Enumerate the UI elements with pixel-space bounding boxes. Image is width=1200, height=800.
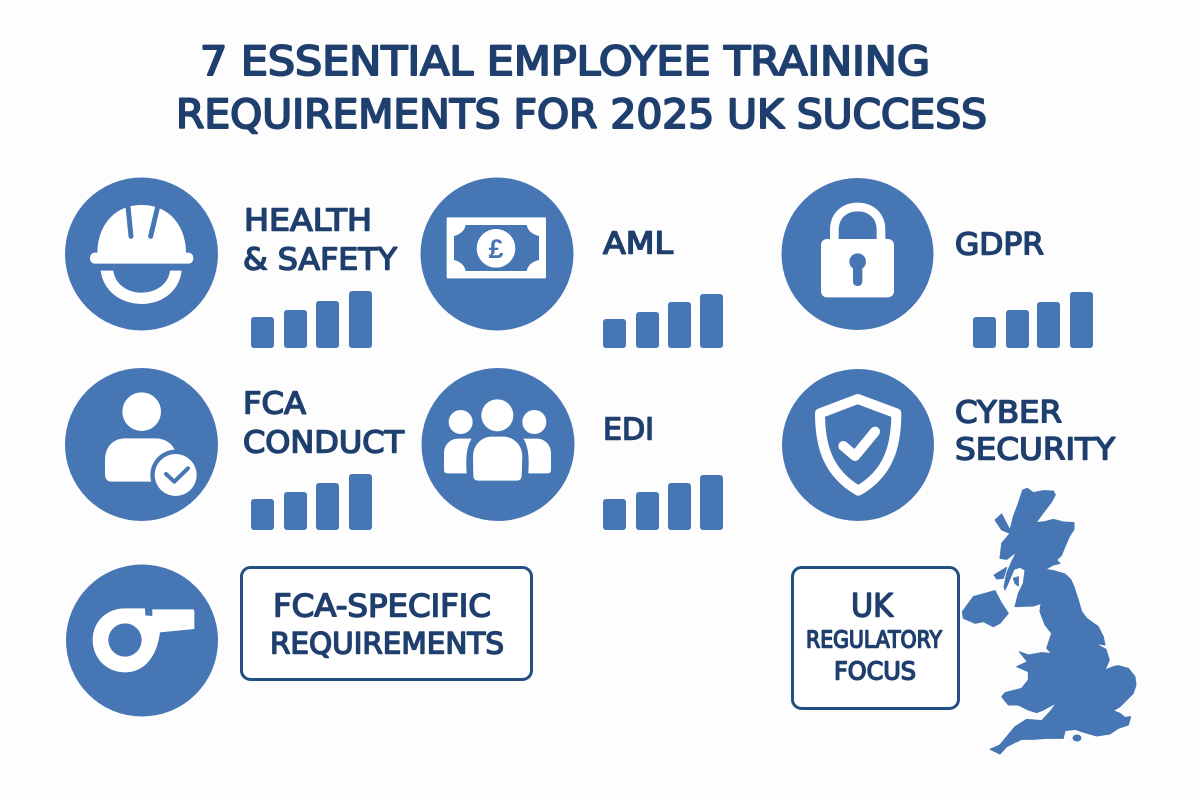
icon: group of people xyxy=(422,368,574,521)
label: FCA conduct: FCA xyxy=(243,386,307,422)
label: FCA conduct: CONDUCT xyxy=(243,426,405,460)
bar chart: FCA conduct xyxy=(251,474,372,530)
icon: shield with check xyxy=(782,369,934,521)
label: AML: AML xyxy=(603,226,673,262)
callout: UK regulatory focus xyxy=(792,568,958,708)
bar chart: AML xyxy=(603,294,723,348)
icon: person with check badge xyxy=(65,368,218,521)
panel: FCA-specific requirements xyxy=(66,564,532,716)
title: 7 ESSENTIAL EMPLOYEE TRAINING xyxy=(200,39,930,85)
callout: UK regulatory focus: FOCUS xyxy=(834,656,916,686)
icon: hard hat xyxy=(65,178,218,330)
icon: whistle xyxy=(66,564,218,716)
label: FCA conduct xyxy=(243,386,405,460)
map: United Kingdom xyxy=(962,488,1136,754)
panel: GDPR xyxy=(782,178,1093,348)
label: cyber security xyxy=(955,396,1116,468)
label: health and safety xyxy=(243,204,398,278)
icon: padlock xyxy=(782,178,934,330)
icon: banknote xyxy=(420,178,574,330)
panel: AML xyxy=(420,178,723,348)
callout: UK regulatory focus: REGULATORY xyxy=(806,628,943,654)
bar chart: health and safety xyxy=(251,291,372,348)
label: cyber security: SECURITY xyxy=(955,432,1116,468)
panel: health and safety xyxy=(65,178,398,348)
title xyxy=(176,39,987,138)
label: GDPR: GDPR xyxy=(955,228,1044,262)
icon: banknote: £ xyxy=(489,234,504,264)
label: cyber security: CYBER xyxy=(955,396,1062,430)
label: health and safety: HEALTH xyxy=(244,204,372,238)
label: health and safety: & SAFETY xyxy=(243,242,398,278)
label: EDI: EDI xyxy=(603,412,654,448)
callout: UK regulatory focus: UK xyxy=(851,586,894,624)
panel: FCA conduct xyxy=(65,368,405,530)
bar chart: EDI xyxy=(603,475,723,530)
panel: EDI xyxy=(422,368,723,530)
title: REQUIREMENTS FOR 2025 UK SUCCESS xyxy=(176,92,987,138)
callout: FCA-specific requirements: FCA-SPECIFIC xyxy=(273,588,491,624)
panel: cyber security xyxy=(782,369,1116,521)
callout: FCA-specific requirements xyxy=(242,568,532,680)
callout: FCA-specific requirements: REQUIREMENTS xyxy=(270,626,504,660)
bar chart: GDPR xyxy=(973,292,1093,348)
